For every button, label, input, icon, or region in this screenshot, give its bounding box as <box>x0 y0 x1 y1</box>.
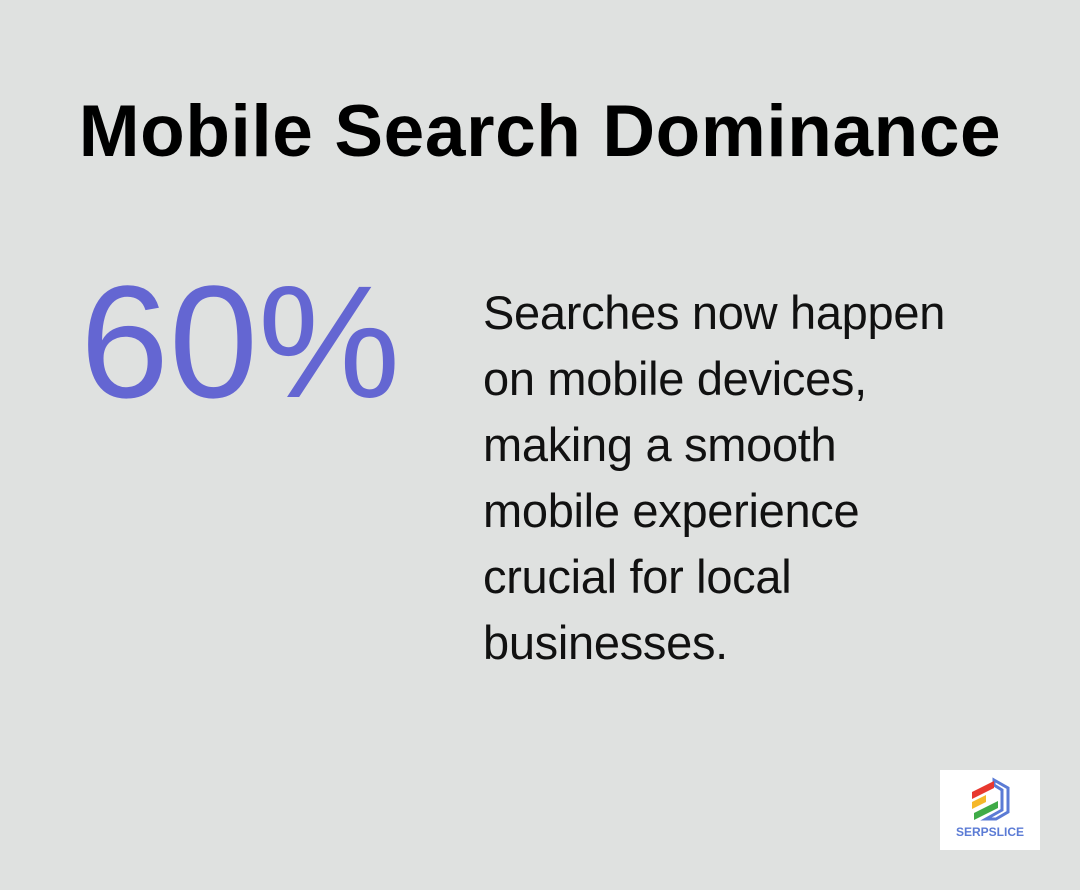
description text: crucial for local <box>483 550 791 603</box>
description text: on mobile devices, <box>483 352 867 405</box>
title: Mobile Search Dominance <box>79 91 1001 172</box>
description text <box>483 286 945 669</box>
logo: serpslice <box>940 770 1040 850</box>
description text: Searches now happen <box>483 286 945 339</box>
description text: businesses. <box>483 616 728 669</box>
stat number: 60% <box>80 252 400 431</box>
logo: serpslice: SERPSLICE <box>956 825 1024 839</box>
description text: making a smooth <box>483 418 836 471</box>
description text: mobile experience <box>483 484 859 537</box>
